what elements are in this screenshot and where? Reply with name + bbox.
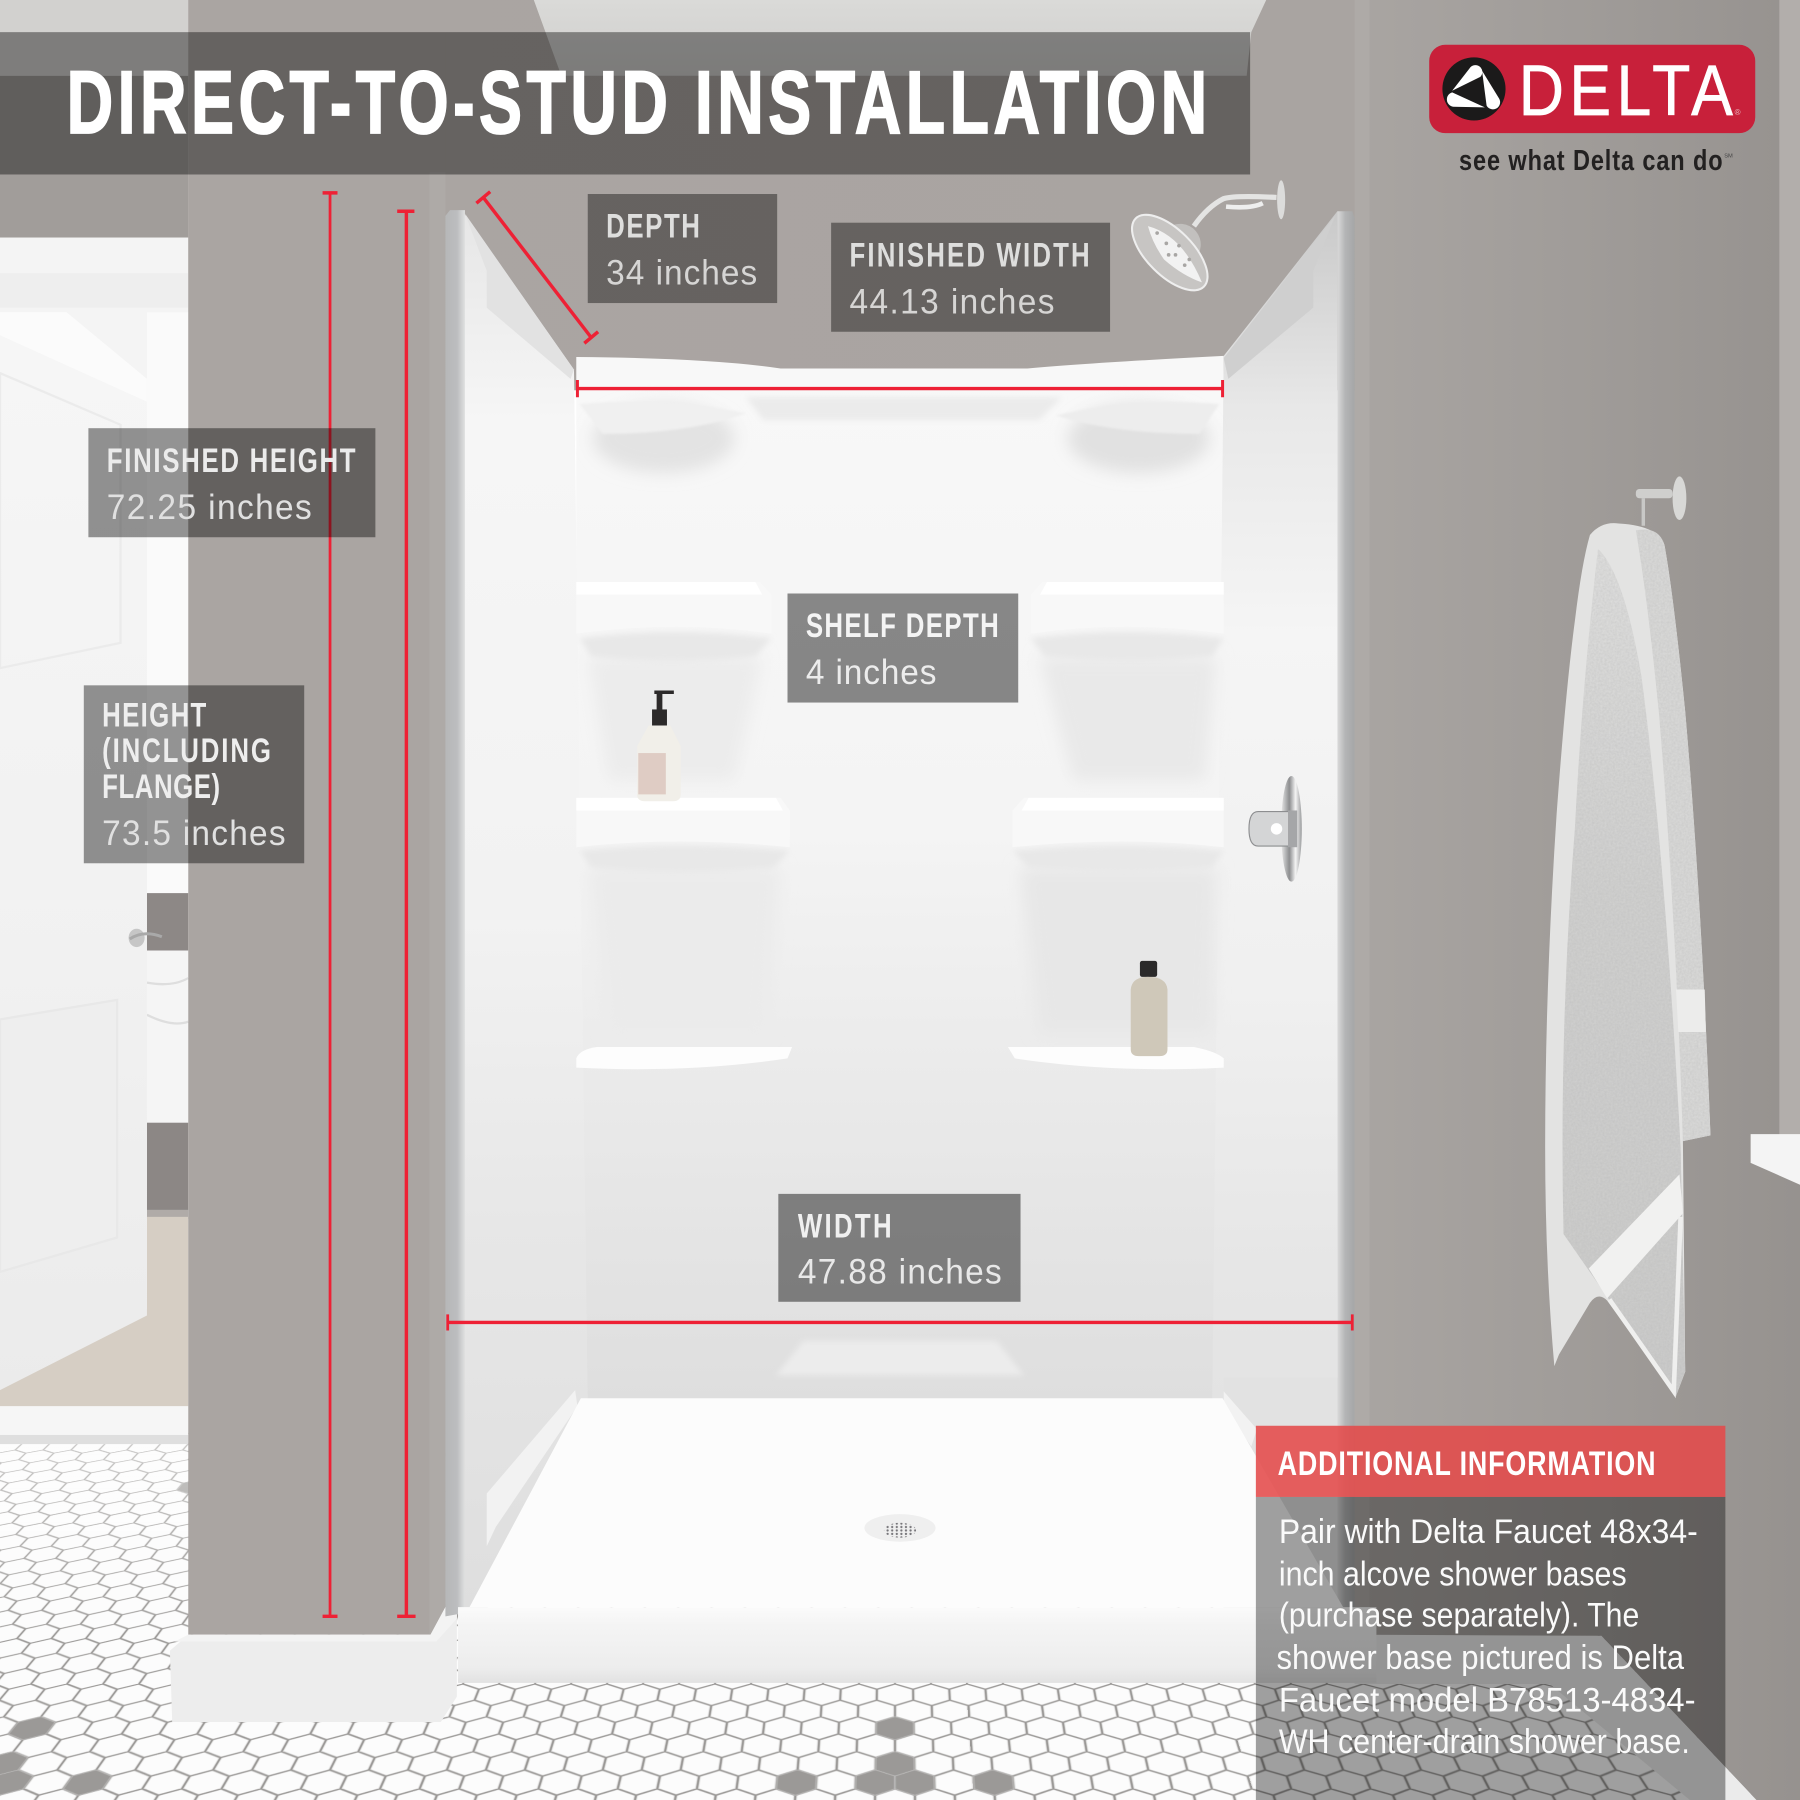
callout: height including flange xyxy=(84,685,304,863)
logo wordmark: DELTA xyxy=(1519,51,1733,131)
shower head xyxy=(1119,180,1285,303)
towel hook xyxy=(1636,476,1686,526)
callout: height including flange: HEIGHT xyxy=(102,696,207,735)
towel bottom edge xyxy=(1609,1217,1681,1391)
shelf 1 right xyxy=(1031,582,1224,661)
door xyxy=(0,312,162,1390)
callout: finished width: FINISHED WIDTH xyxy=(849,236,1090,274)
title band xyxy=(0,32,1250,174)
left bevel xyxy=(465,214,574,379)
shower surround xyxy=(445,210,1376,1683)
panel body: WH center-drain shower base. xyxy=(1279,1723,1690,1761)
shower base top xyxy=(470,1398,1343,1607)
dimension line: depth xyxy=(476,192,598,343)
shelf 2 right xyxy=(1012,798,1224,872)
right curb xyxy=(1224,1391,1257,1446)
panel body: (purchase separately). The xyxy=(1279,1597,1639,1635)
column wall xyxy=(188,0,445,1635)
service mark: SM xyxy=(1724,153,1733,159)
dimension line: height including flange xyxy=(397,211,416,1616)
round bottle xyxy=(1131,961,1167,1056)
towel white band xyxy=(1589,1174,1683,1298)
panel body: inch alcove shower bases xyxy=(1279,1555,1627,1593)
callout: height including flange: FLANGE) xyxy=(102,767,220,806)
dimension line: finished width xyxy=(577,380,1223,397)
panel body: shower base pictured is Delta xyxy=(1277,1639,1684,1677)
right bevel xyxy=(1224,216,1335,379)
right flange xyxy=(1337,211,1355,1636)
counter edge xyxy=(1751,1134,1800,1185)
top lip shading xyxy=(746,397,1062,420)
left room background xyxy=(0,0,188,1639)
shelf 3 right xyxy=(1008,1047,1224,1069)
top corner shelf right xyxy=(1056,402,1219,473)
right wall corner strip xyxy=(1355,0,1370,1636)
callout: finished width: 44.13 inches xyxy=(849,282,1055,322)
towel back fold xyxy=(1636,529,1710,1141)
pump bottle xyxy=(637,691,681,801)
back wall above shower xyxy=(188,0,1371,390)
callout: finished width xyxy=(831,223,1110,332)
callout: depth: 34 inches xyxy=(606,254,757,293)
shower valve xyxy=(1249,776,1302,882)
registered mark: ® xyxy=(1735,108,1741,117)
wood floor xyxy=(0,1217,188,1406)
left curb xyxy=(487,1390,577,1546)
title: DIRECT-TO-STUD INSTALLATION xyxy=(67,52,1207,153)
column baseboard xyxy=(170,1607,457,1722)
towel back band xyxy=(1676,990,1706,1032)
callout: depth: DEPTH xyxy=(606,207,700,246)
drain xyxy=(864,1514,936,1542)
left baseboard xyxy=(0,1406,188,1444)
callout: width: WIDTH xyxy=(798,1207,892,1245)
left flange xyxy=(445,210,465,1616)
right side wall xyxy=(1212,211,1343,1619)
back wall panel xyxy=(576,356,1224,1406)
shelf 2 left xyxy=(576,798,790,872)
callout: shelf depth xyxy=(788,593,1018,703)
callout: shelf depth: SHELF DEPTH xyxy=(806,607,999,645)
door handle xyxy=(129,929,162,947)
logo tagline: see what Delta can do xyxy=(1459,144,1723,176)
top corner shelf left xyxy=(580,402,746,473)
shelf 1 left xyxy=(576,582,771,661)
far right wall strip xyxy=(1779,0,1800,1136)
shower base front xyxy=(458,1607,1376,1683)
left side wall xyxy=(461,211,588,1619)
panel: additional information xyxy=(1256,1426,1725,1800)
callout: width: 47.88 inches xyxy=(798,1253,1002,1292)
callout: finished height: 72.25 inches xyxy=(107,488,312,527)
bed behind door xyxy=(147,893,188,1219)
panel body: Pair with Delta Faucet 48x34- xyxy=(1279,1513,1698,1551)
towel front fold xyxy=(1562,549,1685,1396)
callout: finished height: FINISHED HEIGHT xyxy=(107,441,356,480)
panel body xyxy=(1256,1497,1725,1800)
Delta logo xyxy=(1429,45,1755,133)
callout: finished height xyxy=(88,428,375,537)
callout: depth xyxy=(588,194,777,303)
callout: height including flange: (INCLUDING xyxy=(102,732,271,770)
panel header: ADDITIONAL INFORMATION xyxy=(1278,1444,1656,1483)
center bottom bump xyxy=(776,1341,1024,1375)
callout: width xyxy=(778,1194,1021,1302)
dimension line: width xyxy=(448,1314,1352,1330)
callout: height including flange: 73.5 inches xyxy=(102,814,286,853)
logo mark xyxy=(1442,57,1506,121)
callout: shelf depth: 4 inches xyxy=(806,653,936,692)
panel body: Faucet model B78513-4834- xyxy=(1279,1682,1696,1720)
right baseboard xyxy=(1355,1635,1756,1800)
recess shadows under shelves xyxy=(588,657,1217,1033)
right wall xyxy=(1355,0,1800,1800)
panel header xyxy=(1256,1426,1725,1497)
towel xyxy=(1545,523,1710,1396)
ceiling xyxy=(534,0,1266,76)
shelf 3 left xyxy=(576,1047,792,1069)
dimension line: finished height xyxy=(323,193,338,1616)
